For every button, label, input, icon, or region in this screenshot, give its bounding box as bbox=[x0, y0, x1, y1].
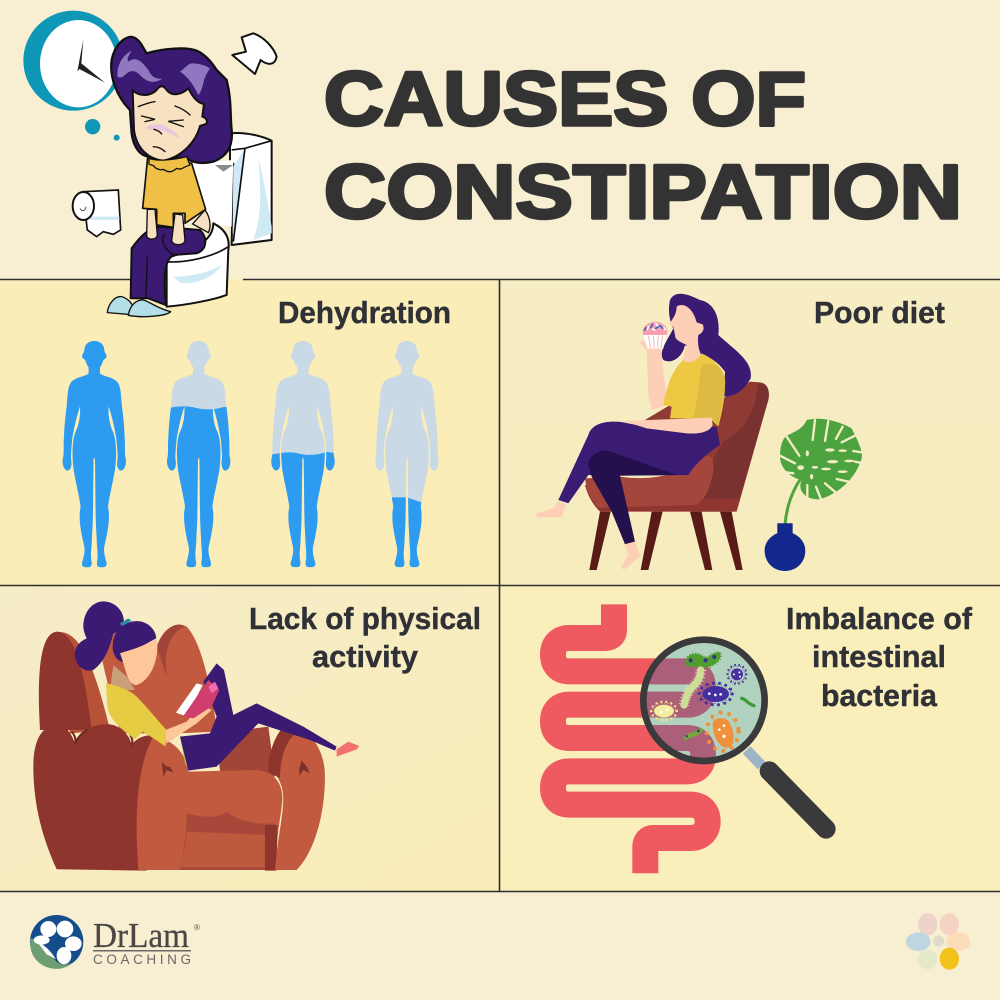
icon: clock thought bubble bbox=[23, 11, 123, 141]
cupcake bbox=[643, 322, 667, 348]
panel: imbalance of intestinal bacteria bbox=[500, 586, 1000, 891]
illustration: woman reading in armchair bbox=[33, 601, 359, 871]
panel: lack of physical activity bbox=[0, 586, 499, 891]
illustration: sad girl on toilet with clock bbox=[23, 11, 277, 317]
bacterium: orange bbox=[707, 712, 739, 751]
heading: imbalance of intestinal bacteria bbox=[786, 601, 973, 713]
footer flower mark bbox=[906, 913, 970, 970]
figure: body water level hips bbox=[271, 341, 335, 568]
illustration: woman eating cupcake in chair bbox=[536, 294, 769, 570]
logo mark bbox=[30, 915, 83, 969]
bacterium: green small right bbox=[742, 698, 754, 706]
icon: toilet roll bbox=[73, 190, 121, 237]
title: CONSTIPATION bbox=[324, 150, 962, 235]
divider lines bbox=[0, 279, 1000, 892]
figure: full hydration body bbox=[63, 341, 126, 567]
heading: lack of physical activity bbox=[249, 601, 481, 674]
icon: monstera plant in vase bbox=[765, 419, 863, 571]
footer logo: DrLam Coaching bbox=[30, 915, 200, 969]
heading: imbalance of intestinal bacteria: intestinal bbox=[812, 639, 946, 674]
heading: lack of physical activity: Lack of physical bbox=[249, 601, 481, 636]
bacterium: green top bbox=[686, 652, 721, 667]
bacterium: purple large bbox=[699, 683, 732, 705]
bacterium: green lower bbox=[685, 730, 701, 738]
bacterium: pale rod bbox=[684, 670, 701, 705]
heading: lack of physical activity: activity bbox=[312, 639, 419, 674]
heading: imbalance of intestinal bacteria: Imbalance of bbox=[786, 601, 973, 636]
toilet bbox=[165, 133, 272, 307]
title: CAUSES OF bbox=[324, 57, 806, 142]
heading: poor diet: Poor diet bbox=[814, 295, 945, 330]
bacterium: purple small bbox=[727, 665, 747, 684]
heading: dehydration: Dehydration bbox=[278, 295, 451, 330]
icon: crumpled paper bbox=[232, 33, 277, 74]
panel: poor diet bbox=[500, 279, 1000, 585]
woman bbox=[75, 601, 359, 771]
logo wordmark: DrLam bbox=[93, 916, 189, 955]
footer logo: DrLam Coaching: COACHING bbox=[93, 952, 191, 967]
girl bbox=[107, 37, 232, 317]
icon: magnifying glass with bacteria bbox=[570, 635, 826, 829]
title bbox=[324, 57, 962, 235]
heading: imbalance of intestinal bacteria: bacteria bbox=[821, 678, 938, 713]
illustration: intestine bbox=[553, 604, 708, 873]
figure: body water level calves bbox=[375, 341, 439, 568]
bacterium: yellow bbox=[651, 702, 677, 720]
panel: dehydration bbox=[0, 279, 499, 585]
footer logo: DrLam Coaching: ® bbox=[194, 923, 200, 932]
figure: body water level chest bbox=[167, 341, 230, 568]
